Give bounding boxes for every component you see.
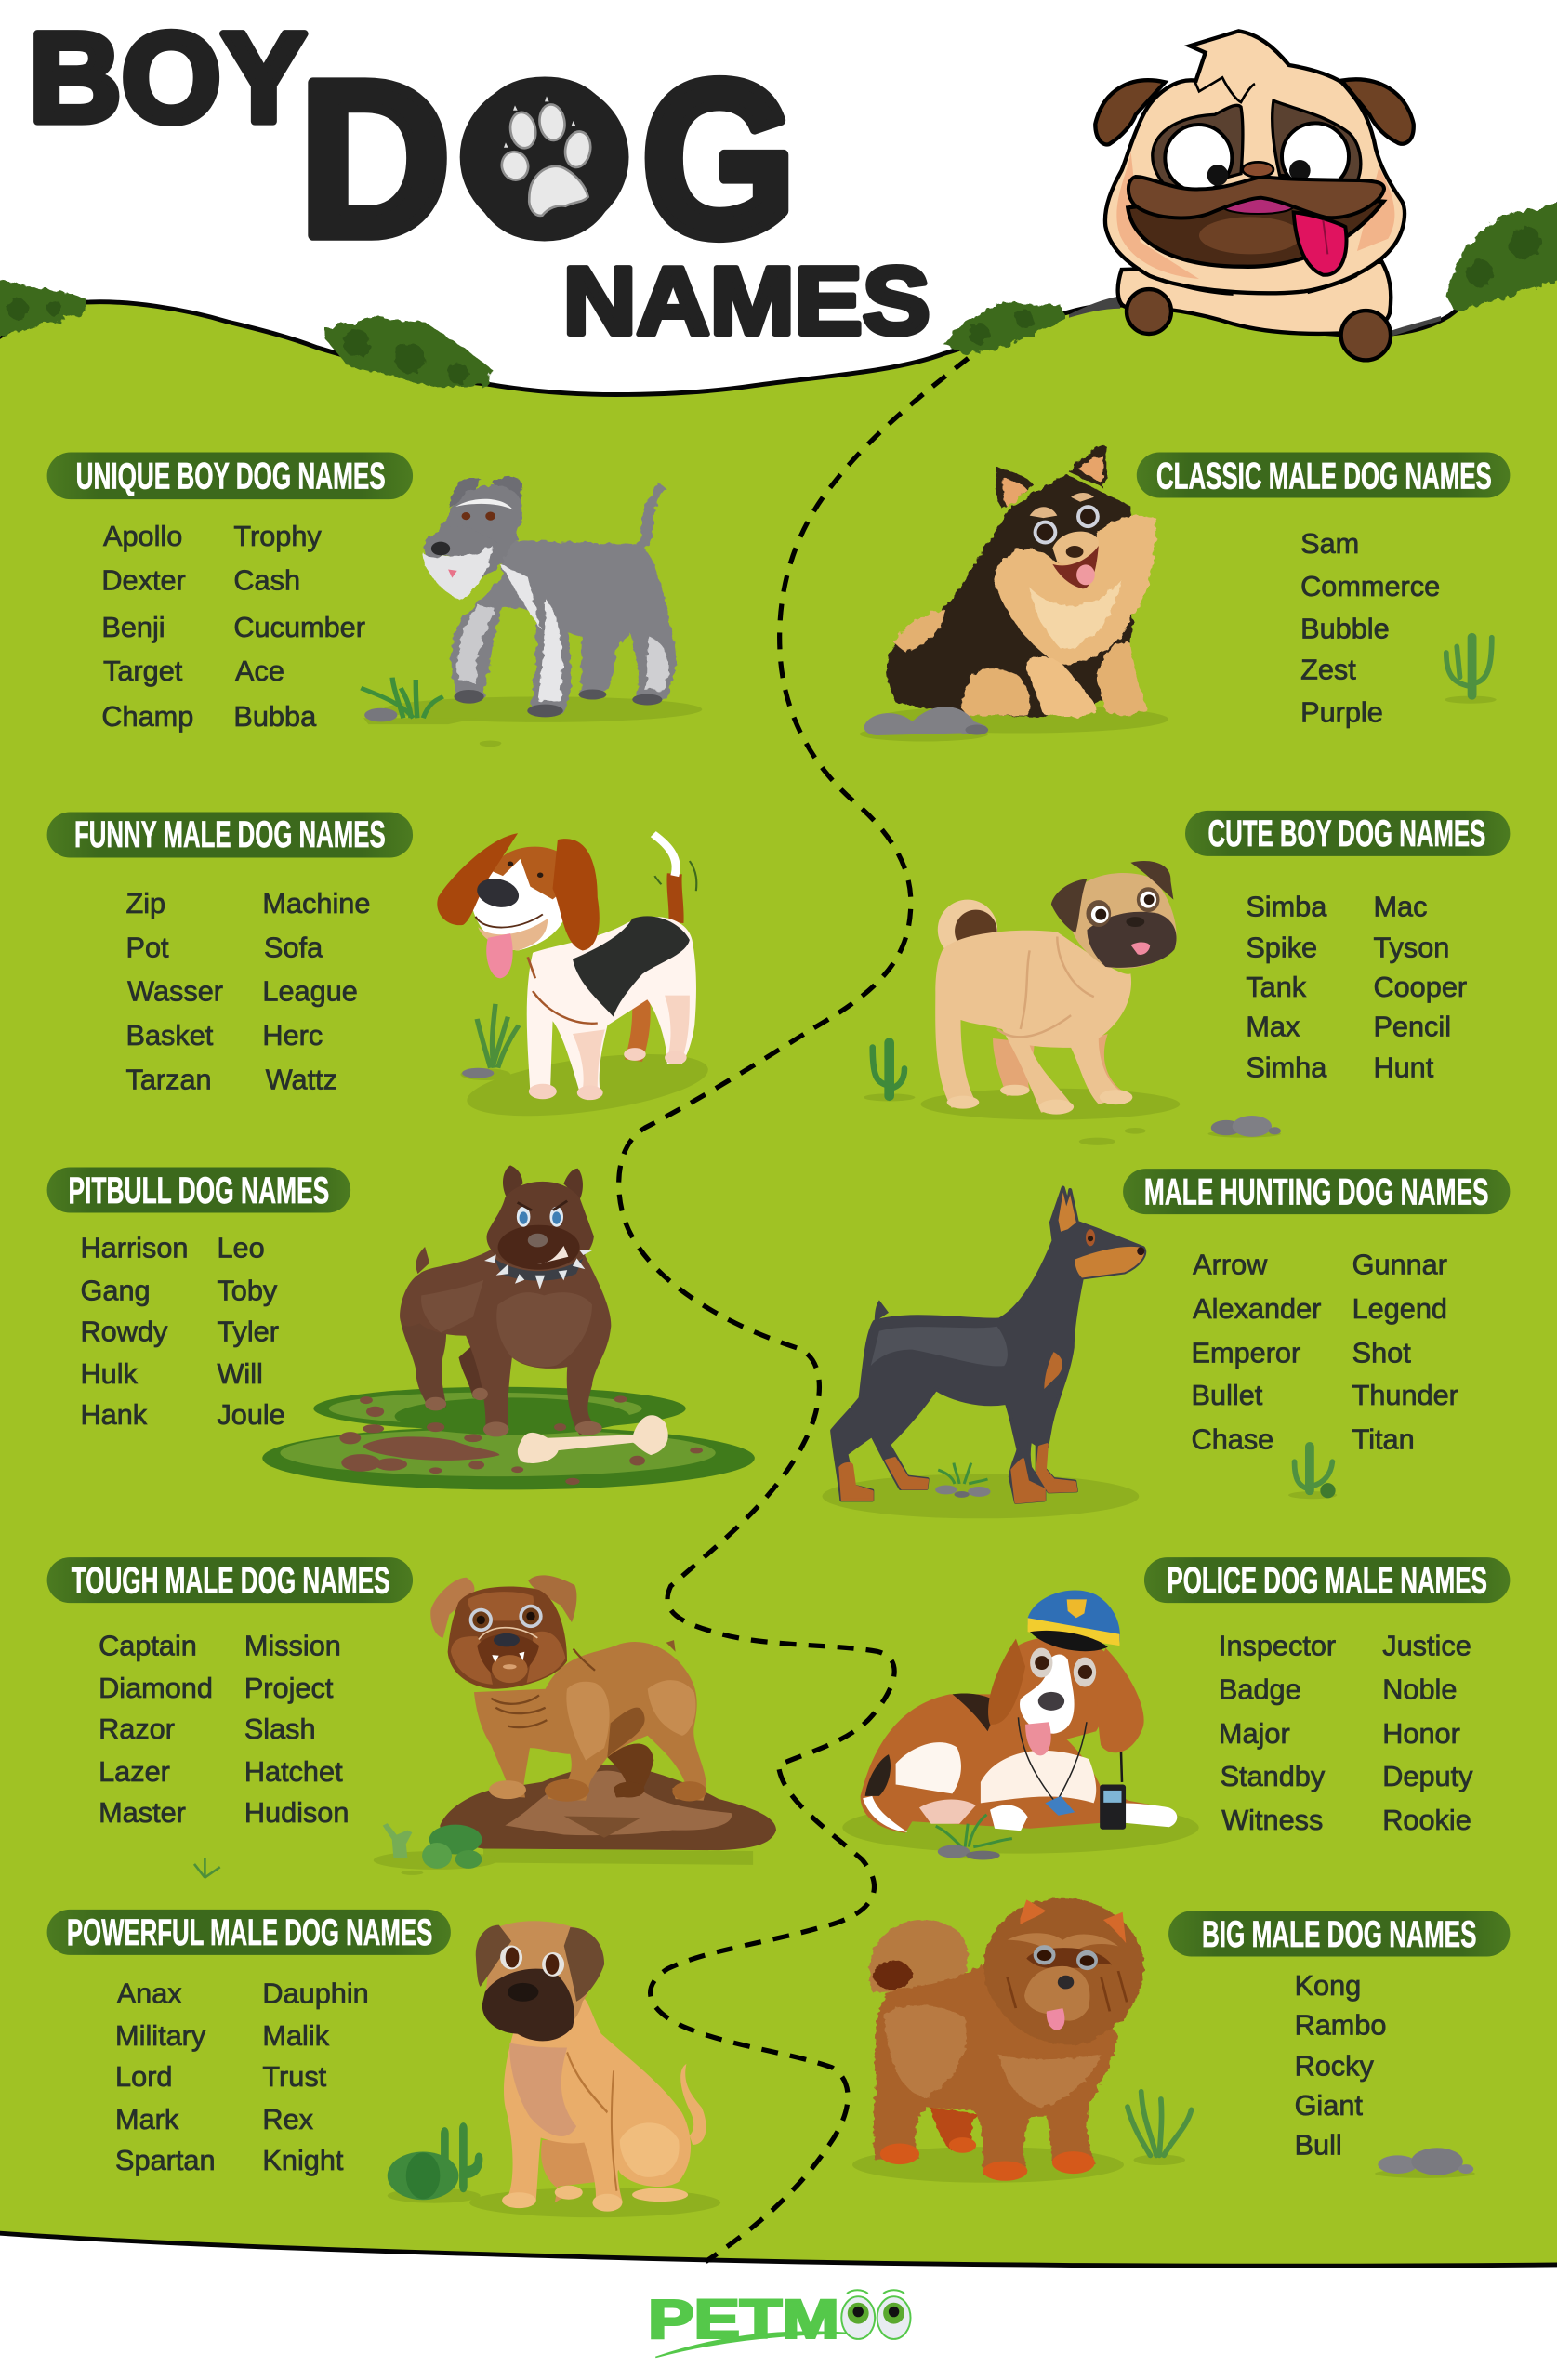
icon: paw in the O bbox=[498, 96, 593, 216]
name list: Tyler bbox=[217, 1315, 279, 1347]
icon: small grass patch bbox=[194, 1858, 220, 1878]
name list: Standby bbox=[1221, 1760, 1326, 1792]
pill heading bbox=[47, 453, 413, 499]
name list: Simba bbox=[1246, 890, 1327, 922]
name list: Arrow bbox=[1193, 1249, 1268, 1281]
pill heading bbox=[47, 1557, 413, 1603]
name list: Pot bbox=[126, 931, 169, 963]
name list: Tank bbox=[1246, 971, 1307, 1003]
name list: Bubba bbox=[233, 700, 317, 733]
name list: Diamond bbox=[99, 1672, 213, 1704]
icon: rocks near big names bbox=[1375, 2148, 1475, 2178]
bush: middle left bbox=[324, 317, 492, 387]
name list: Legend bbox=[1352, 1292, 1447, 1325]
illustration: mastiff with cactus bbox=[388, 1921, 720, 2217]
name list: Witness bbox=[1221, 1804, 1323, 1836]
name list: Pencil bbox=[1373, 1010, 1451, 1042]
pill heading bbox=[47, 1910, 451, 1955]
name list: Harrison bbox=[81, 1232, 188, 1264]
name list: Gang bbox=[81, 1274, 151, 1306]
name list: Joule bbox=[217, 1398, 285, 1431]
title word: DOG: D bbox=[299, 34, 451, 283]
bush: far left bbox=[0, 279, 86, 340]
panel: male hunting dog names bbox=[1123, 1169, 1510, 1455]
name list: Target bbox=[103, 654, 183, 687]
name list bbox=[1246, 890, 1467, 1083]
name list: Razor bbox=[99, 1712, 175, 1745]
name list: Anax bbox=[117, 1977, 182, 2009]
name list bbox=[126, 887, 370, 1095]
name list: Benji bbox=[101, 611, 165, 643]
illustration: small cacti by the rock bbox=[374, 1823, 753, 1875]
name list: Commerce bbox=[1300, 570, 1440, 602]
pill heading: UNIQUE BOY DOG NAMES bbox=[76, 456, 386, 497]
icon: cactus near pug bbox=[864, 1043, 915, 1101]
name list: Sofa bbox=[264, 931, 323, 963]
name list: Basket bbox=[126, 1019, 214, 1051]
name list: Sam bbox=[1300, 527, 1359, 560]
name list: Ace bbox=[235, 654, 284, 687]
name list: Herc bbox=[262, 1019, 323, 1051]
name list: Bull bbox=[1295, 2129, 1342, 2162]
name list: Max bbox=[1246, 1010, 1300, 1042]
name list bbox=[99, 1629, 349, 1829]
name list: Master bbox=[99, 1796, 186, 1829]
illustration: barrel cacti by the rock bbox=[422, 1825, 482, 1869]
illustration: pomeranian bbox=[860, 445, 1168, 741]
name list bbox=[115, 1977, 369, 2176]
pill heading bbox=[47, 812, 413, 857]
name list: Dexter bbox=[101, 563, 186, 596]
name list: Justice bbox=[1382, 1629, 1471, 1661]
panel: classic male dog names bbox=[1137, 453, 1510, 728]
name list: Simha bbox=[1246, 1051, 1327, 1083]
name list: Cooper bbox=[1373, 971, 1467, 1003]
name list: Dauphin bbox=[262, 1977, 369, 2009]
name list: Trophy bbox=[233, 520, 322, 552]
illustration: chow chow bbox=[852, 1898, 1144, 2183]
logo wordmark bbox=[648, 2289, 909, 2349]
name list: Spartan bbox=[115, 2144, 216, 2176]
illustration: pitbull on dirt with bone bbox=[262, 1165, 755, 1489]
name list: Rex bbox=[262, 2103, 314, 2135]
title word: DOG: G bbox=[641, 34, 796, 283]
illustration: pug bbox=[920, 861, 1180, 1120]
logo eyes bbox=[841, 2290, 911, 2339]
name list: Hatchet bbox=[244, 1755, 343, 1788]
name list: Giant bbox=[1295, 2089, 1363, 2122]
name list: Mission bbox=[244, 1629, 341, 1661]
name list: Purple bbox=[1300, 695, 1383, 728]
dashed trail bbox=[619, 358, 969, 2262]
title word: DOG: O bbox=[465, 34, 626, 283]
name list: Inspector bbox=[1219, 1629, 1336, 1661]
name list: Apollo bbox=[103, 520, 182, 552]
name list: Alexander bbox=[1193, 1292, 1321, 1325]
name list bbox=[1300, 527, 1440, 728]
name list: Noble bbox=[1382, 1673, 1457, 1706]
illustration: bulldog on rock bbox=[430, 1575, 776, 1850]
pill heading bbox=[47, 1168, 350, 1212]
name list: Wasser bbox=[127, 975, 223, 1008]
name list bbox=[1219, 1629, 1473, 1836]
name list: Will bbox=[217, 1357, 263, 1390]
name list: Mark bbox=[115, 2103, 179, 2135]
name list bbox=[1295, 1969, 1387, 2162]
pill heading: FUNNY MALE DOG NAMES bbox=[74, 814, 386, 855]
title word: DOG bbox=[299, 34, 796, 283]
panel: tough male dog names bbox=[47, 1557, 413, 1829]
name list: Hunt bbox=[1373, 1051, 1434, 1083]
name list: Cucumber bbox=[233, 611, 365, 643]
illustration: doberman bbox=[823, 1187, 1144, 1518]
name list: Lazer bbox=[99, 1755, 170, 1788]
name list: Cash bbox=[233, 563, 300, 596]
name list: Trust bbox=[262, 2060, 327, 2093]
name list: Tyson bbox=[1373, 931, 1449, 963]
name list: Leo bbox=[217, 1232, 265, 1264]
name list: Knight bbox=[262, 2144, 344, 2176]
panel: big male dog names bbox=[1168, 1911, 1510, 2162]
name list: Spike bbox=[1246, 931, 1317, 963]
name list: Rookie bbox=[1382, 1804, 1471, 1836]
pill heading: POWERFUL MALE DOG NAMES bbox=[67, 1912, 432, 1953]
logo wordmark: PETM bbox=[648, 2289, 839, 2349]
illustration: beagle bbox=[437, 833, 713, 1128]
name list: Slash bbox=[244, 1712, 316, 1745]
name list bbox=[1192, 1249, 1458, 1455]
ground specks bbox=[480, 741, 1146, 1145]
illustration: police beagle bbox=[842, 1591, 1199, 1860]
name list: Tarzan bbox=[126, 1063, 212, 1095]
name list: Lord bbox=[115, 2060, 172, 2093]
panel: cute boy dog names bbox=[1185, 811, 1510, 1083]
name list: Kong bbox=[1295, 1969, 1361, 2002]
icon: plant near chow bbox=[1128, 2092, 1192, 2165]
name list: Titan bbox=[1352, 1422, 1415, 1455]
name list bbox=[101, 520, 365, 733]
pill heading: PITBULL DOG NAMES bbox=[68, 1170, 329, 1211]
logo: PetMoo bbox=[648, 2289, 911, 2358]
name list: Honor bbox=[1382, 1717, 1460, 1750]
name list: Toby bbox=[217, 1274, 278, 1306]
panel: police dog male names bbox=[1144, 1557, 1510, 1836]
name list: Shot bbox=[1352, 1336, 1411, 1368]
title bbox=[29, 7, 930, 354]
name list bbox=[81, 1232, 285, 1431]
name list: Major bbox=[1219, 1717, 1290, 1750]
name list: Hank bbox=[81, 1398, 148, 1431]
name list: Machine bbox=[262, 887, 370, 919]
name list: Rowdy bbox=[81, 1315, 168, 1347]
name list: Mac bbox=[1373, 890, 1427, 922]
icon: rocks near pug bbox=[1208, 1116, 1281, 1138]
name list: Malik bbox=[262, 2019, 330, 2052]
bush: far right bbox=[1445, 202, 1557, 311]
panel: funny male dog names bbox=[47, 812, 413, 1095]
panel: unique boy dog names bbox=[47, 453, 413, 733]
name list: Champ bbox=[101, 700, 193, 733]
pill heading: TOUGH MALE DOG NAMES bbox=[72, 1560, 390, 1601]
name list: Bubble bbox=[1300, 613, 1390, 645]
name list: Project bbox=[244, 1672, 334, 1704]
panel: pitbull dog names bbox=[47, 1168, 350, 1431]
name list: Hulk bbox=[81, 1357, 139, 1390]
name list: Rambo bbox=[1295, 2009, 1387, 2042]
name list: Chase bbox=[1192, 1422, 1273, 1455]
title word: NAMES: NAMES bbox=[563, 247, 930, 354]
bush: centre right bbox=[943, 302, 1065, 355]
name list: Military bbox=[115, 2019, 206, 2052]
name list: Captain bbox=[99, 1629, 197, 1661]
name list: Rocky bbox=[1295, 2050, 1374, 2082]
name list: League bbox=[262, 975, 358, 1008]
name list: Badge bbox=[1219, 1673, 1301, 1706]
icon: cactus near classic names bbox=[1445, 638, 1497, 704]
logo wordmark: OO bbox=[842, 2291, 909, 2348]
name list: Gunnar bbox=[1352, 1249, 1447, 1281]
illustration: schnauzer bbox=[361, 476, 702, 746]
name list: Bullet bbox=[1192, 1379, 1263, 1411]
name list: Deputy bbox=[1382, 1760, 1473, 1792]
name list: Wattz bbox=[266, 1063, 337, 1095]
name list: Hudison bbox=[244, 1796, 349, 1829]
name list: Zest bbox=[1300, 654, 1356, 686]
name list: Emperor bbox=[1192, 1336, 1300, 1368]
name list: Thunder bbox=[1352, 1379, 1458, 1411]
name list: Zip bbox=[126, 887, 165, 919]
title word: BOY: BOY bbox=[29, 7, 307, 150]
logo swoosh bbox=[655, 2332, 847, 2358]
icon: cactus near hunting names bbox=[1288, 1447, 1337, 1499]
panel: powerful male dog names bbox=[47, 1910, 451, 2176]
mascot: pug peeking over the hill bbox=[1069, 31, 1441, 360]
